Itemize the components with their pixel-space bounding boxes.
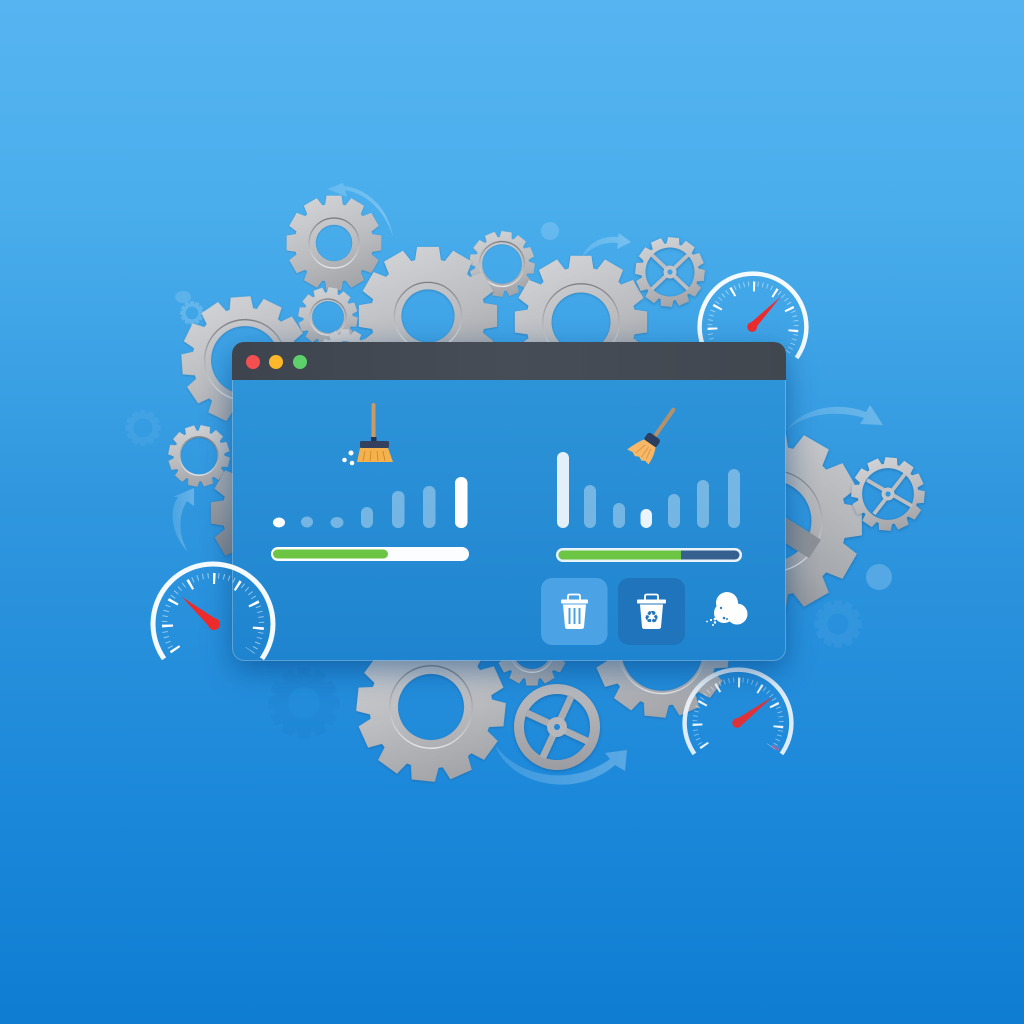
arrow: top left rotation bbox=[327, 183, 393, 237]
window title bar bbox=[232, 342, 786, 380]
arrow: left upward bbox=[173, 488, 194, 552]
gauge: left bbox=[150, 562, 276, 660]
gear: left large bbox=[178, 293, 312, 427]
gauge: bottom right bbox=[682, 667, 794, 756]
gear: small bottom centre bbox=[496, 614, 568, 686]
gear: large bottom bbox=[350, 626, 512, 788]
progress bar: right bbox=[556, 548, 742, 562]
gear: small left bbox=[163, 420, 235, 492]
arrow: right rotation bbox=[787, 405, 883, 430]
window control: minimise bbox=[269, 355, 283, 369]
gear: spoked top right bbox=[632, 234, 708, 310]
gear: large top centre bbox=[359, 247, 497, 385]
button: trash bbox=[541, 578, 608, 645]
panel shadow bbox=[232, 352, 786, 671]
panel: application window bbox=[232, 342, 786, 660]
icon: upright broom with dust bbox=[342, 403, 393, 465]
gear: large right bbox=[680, 430, 862, 612]
gear: spoked right bbox=[848, 454, 928, 534]
button: recycle bin bbox=[618, 578, 685, 645]
icon: dust cloud bbox=[706, 592, 748, 626]
gauge: top right bbox=[697, 271, 809, 360]
chart: right bars bbox=[557, 452, 740, 528]
gear: top bbox=[287, 196, 381, 290]
icon: tilted broom bbox=[627, 400, 684, 465]
window body bbox=[232, 342, 786, 660]
gear: large top right bbox=[515, 256, 647, 388]
arrow: top right rotation bbox=[582, 233, 631, 257]
window control: maximise bbox=[293, 355, 307, 369]
arrow: bottom rotation bbox=[495, 745, 627, 785]
gear: left hidden bbox=[211, 446, 345, 580]
chart: left bars rising bbox=[273, 477, 468, 528]
window control: close bbox=[246, 355, 260, 369]
gear: bottom right bbox=[588, 576, 736, 724]
gear: small top centre bbox=[465, 227, 539, 301]
wheel: spoked bottom bbox=[512, 682, 602, 772]
gear: tiny partly hidden bbox=[319, 329, 371, 381]
progress bar: left bbox=[271, 547, 469, 561]
gear: small under top bbox=[294, 283, 362, 351]
button: recycle bin: ♻ bbox=[644, 608, 659, 628]
faint background decorations bbox=[125, 222, 892, 739]
